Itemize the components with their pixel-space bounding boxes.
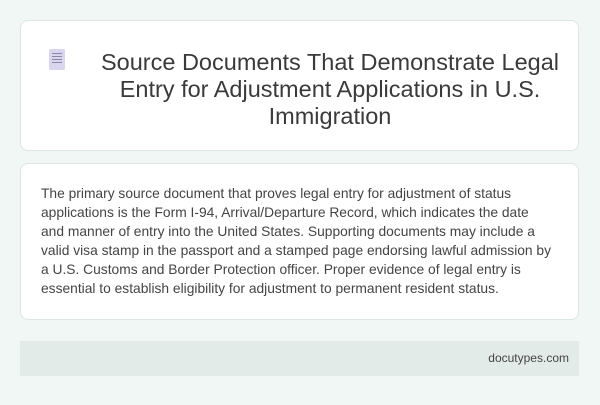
header card (20, 20, 579, 151)
body text panel (20, 163, 579, 320)
footer (20, 341, 579, 376)
icon: document (49, 49, 65, 70)
title: Source Documents That Demonstrate Legal Entry for Adjustment Applications in U.S. Immigration (101, 49, 559, 129)
footer: docutypes.com (488, 351, 569, 365)
body text panel: The primary source document that proves legal entry for adjustment of status applications is the Form I-94, Arrival/Departure Record, which indicates the date and manner of entry into the United States. Supporting documents may include a valid visa stamp in the passport and a stamped page endorsing lawful admission by a U.S. Customs and Border Protection officer. Proper evidence of legal entry is essential to establish eligibility for adjustment to permanent resident status. (41, 186, 551, 296)
